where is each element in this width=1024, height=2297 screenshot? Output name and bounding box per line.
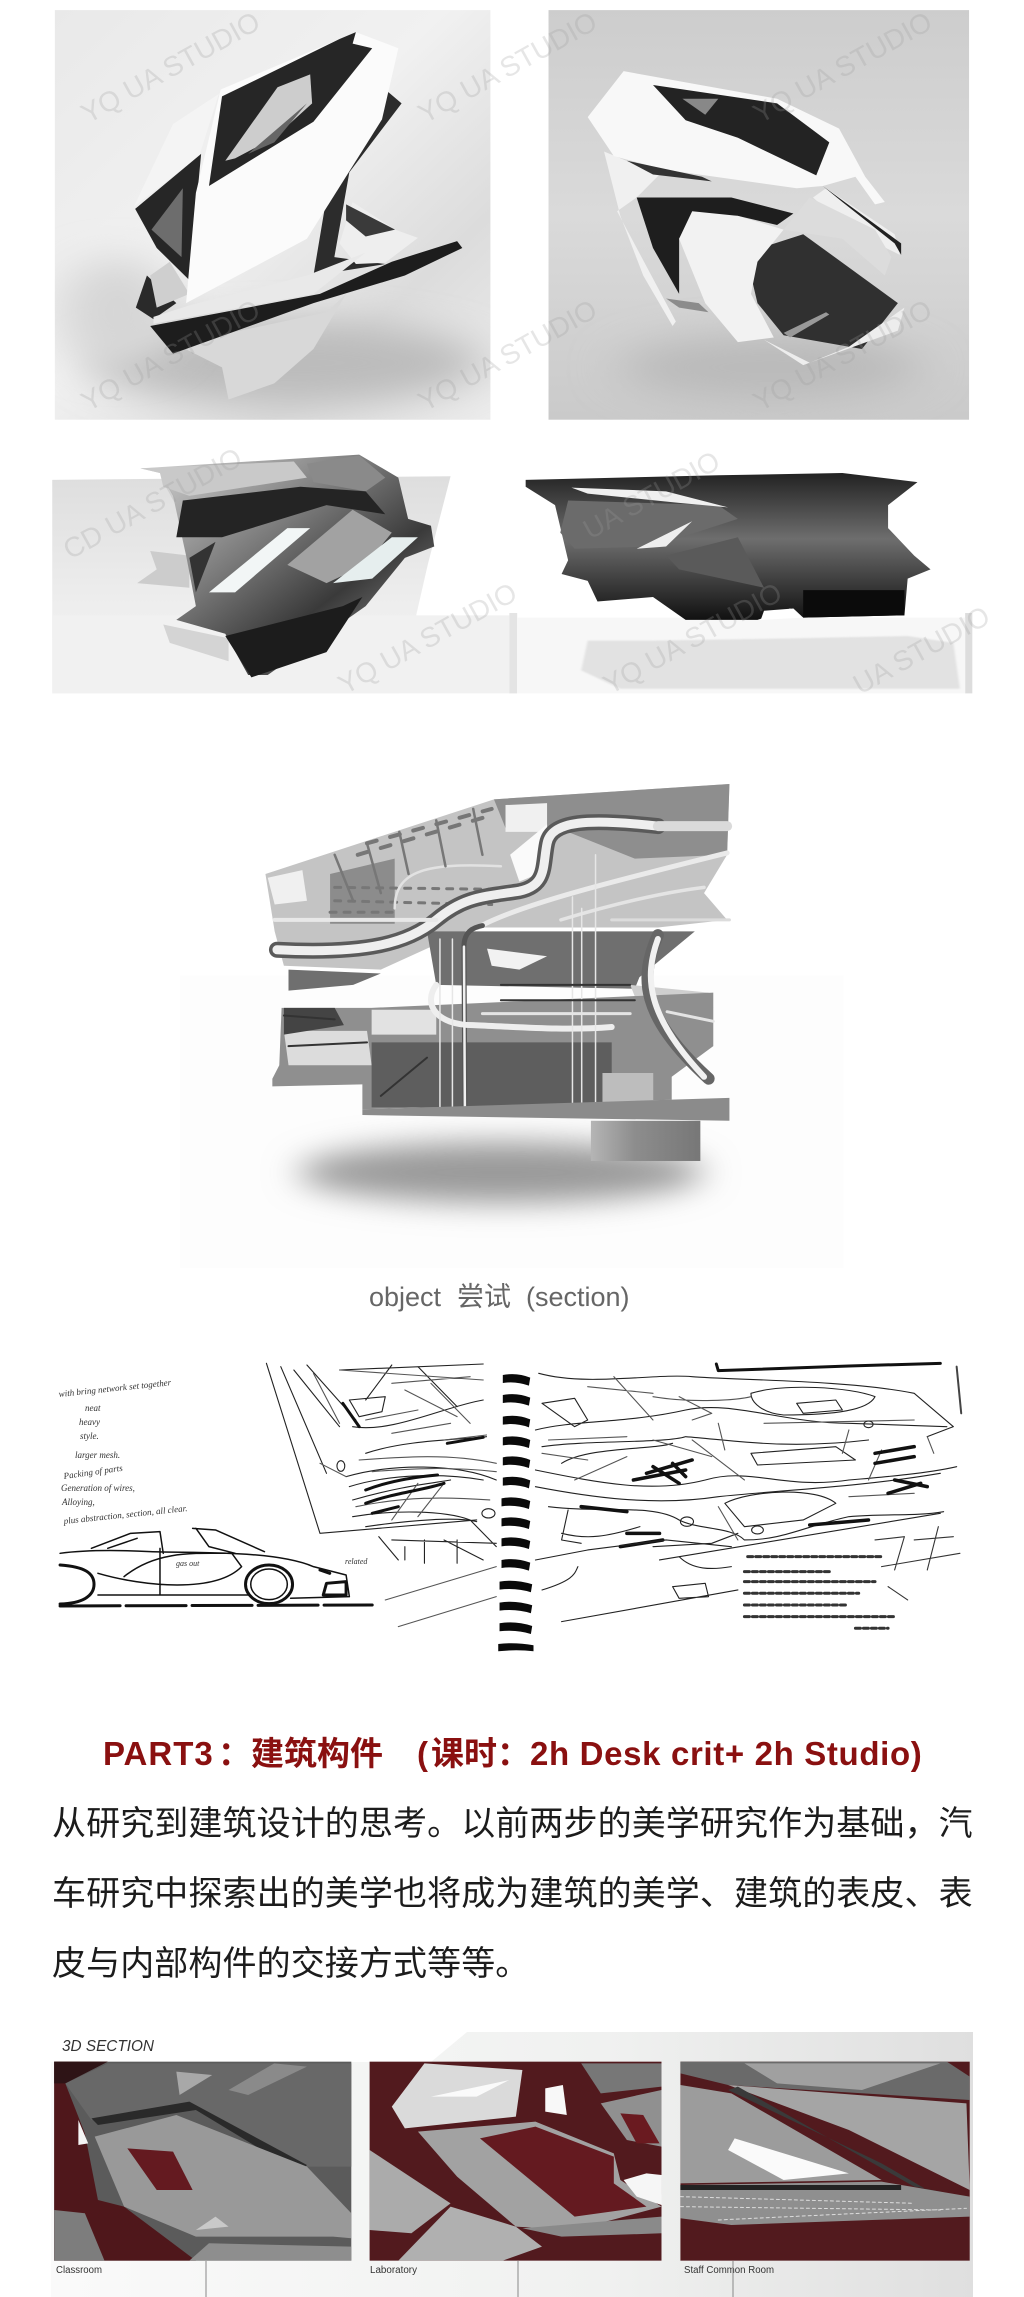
- sketch: notebook car and building: [60, 1363, 961, 1651]
- sketch handwriting: English notes: Alloying,: [61, 1497, 95, 1507]
- heading: part 3: [103, 1735, 922, 1772]
- view: staff common room: [680, 2062, 970, 2261]
- middle dark: [427, 931, 695, 989]
- heading: part 3: ：建筑构件: [218, 1735, 383, 1772]
- sketch handwriting: English notes: neat: [85, 1403, 101, 1413]
- heading: part 3: 2h Desk crit+ 2h Studio): [530, 1735, 922, 1772]
- caption: object section: object: [369, 1282, 441, 1312]
- 3D section title: 3D SECTION: [62, 2038, 154, 2055]
- sketch handwriting: English notes: plus abstraction, section, all clear.: [62, 1503, 188, 1526]
- 3D section panel background: [51, 2032, 973, 2297]
- heading: part 3: 课时：: [431, 1735, 530, 1772]
- view: classroom: [54, 2062, 351, 2261]
- caption: object section: 尝试: [457, 1282, 511, 1312]
- watermark: YQ UA STUDIO: [748, 294, 937, 417]
- heading: part 3: (: [417, 1735, 428, 1772]
- watermark: YQ UA STUDIO: [598, 577, 787, 700]
- openings: [506, 803, 547, 832]
- view: laboratory: [370, 2062, 661, 2261]
- watermark: CD UA STUDIO: [58, 442, 247, 565]
- sketch: building upper-left page: [266, 1363, 496, 1627]
- watermark: YQ UA STUDIO: [76, 6, 265, 129]
- label: staff common room: [684, 2261, 774, 2297]
- sketch handwriting: English notes: Packing of parts: [62, 1463, 124, 1481]
- 3D section views: [54, 2062, 970, 2261]
- watermark: YQ UA STUDIO: [333, 577, 522, 700]
- sketch handwriting: English notes: related: [345, 1557, 368, 1566]
- roof band: [494, 784, 729, 859]
- silhouette upper: [265, 784, 729, 970]
- caption: object section: (section): [526, 1282, 630, 1312]
- pipes: [275, 809, 729, 1111]
- render photo: chrome object perspective: [52, 442, 522, 700]
- sketch: building right page: [535, 1363, 961, 1622]
- lower body: [272, 993, 713, 1109]
- sketch handwriting: English notes: heavy: [79, 1417, 100, 1427]
- body text: [52, 1805, 973, 1983]
- watermark: YQ UA STUDIO: [413, 6, 602, 129]
- sketch handwriting: English notes: Generation of wires,: [61, 1483, 135, 1493]
- sketch handwriting: English notes: style.: [80, 1431, 99, 1441]
- watermark: UA STUDIO: [848, 600, 995, 700]
- render photo: dark object side view: [509, 445, 995, 700]
- render photo: white object front view: [55, 6, 490, 420]
- caption: object section: [369, 1282, 630, 1312]
- body text: 从研究到建筑设计的思考。以前两步的美学研究作为基础，汽: [52, 1805, 973, 1843]
- watermark: front view lower: YQ UA STUDIO: [76, 294, 265, 417]
- body text: 皮与内部构件的交接方式等等。: [52, 1945, 529, 1983]
- sketch: handwritten notes in Chinese: [744, 1557, 895, 1628]
- section render: mechanical object: [266, 784, 732, 1224]
- heading: part 3: PART3: [103, 1735, 214, 1772]
- base column: [591, 1121, 700, 1161]
- body text: 车研究中探索出的美学也将成为建筑的美学、建筑的表皮、表: [52, 1875, 973, 1913]
- label: laboratory: Laboratory: [370, 2265, 417, 2276]
- watermark: YQ UA STUDIO: [748, 6, 937, 129]
- sketch handwriting: English notes: gas out: [176, 1559, 200, 1568]
- label: classroom: Classroom: [56, 2265, 102, 2276]
- sketch handwriting: English notes: larger mesh.: [75, 1450, 120, 1460]
- render photo: white object rear view: [413, 6, 969, 420]
- sketch: car: [60, 1528, 372, 1606]
- watermark: YQ UA STUDIO: [413, 294, 602, 417]
- label: staff common room: Staff Common Room: [684, 2265, 774, 2276]
- sketch handwriting: English notes: with bring network set together: [58, 1377, 172, 1399]
- floor shadow: [298, 1142, 704, 1203]
- watermark: UA STUDIO: [578, 445, 725, 545]
- sketch: spiral binding: [498, 1374, 534, 1651]
- sketch handwriting: English notes: [58, 1377, 368, 1568]
- base slab: [362, 1098, 729, 1121]
